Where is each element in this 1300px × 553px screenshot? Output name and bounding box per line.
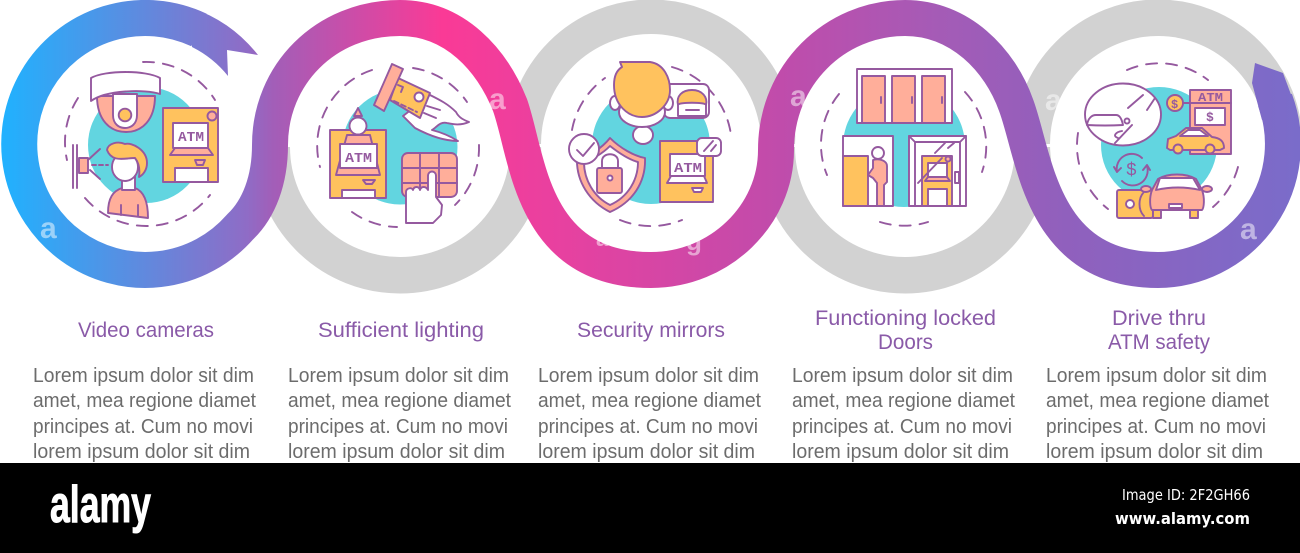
heading: Video cameras <box>78 319 214 342</box>
heading <box>815 307 996 354</box>
watermark letters: a <box>596 226 609 251</box>
body text: principes at. Cum no movi <box>1046 415 1266 438</box>
body text: principes at. Cum no movi <box>538 415 758 438</box>
car and cash <box>1117 174 1212 218</box>
body text: Lorem ipsum dolor sit dim <box>288 364 509 387</box>
icon: security mirrors <box>569 62 731 226</box>
body text: lorem ipsum dolor sit dim <box>792 440 1009 463</box>
ribbon end <box>1252 63 1296 120</box>
column 1: video cameras <box>33 319 256 463</box>
heading: Functioning locked <box>815 307 996 330</box>
body text: amet, mea regione diamet <box>33 389 256 412</box>
watermark letters: a <box>1045 84 1062 117</box>
website: www.alamy.com <box>1115 509 1250 528</box>
head from above <box>610 62 673 144</box>
body text: Lorem ipsum dolor sit dim <box>33 364 254 387</box>
wall sensor <box>73 145 108 188</box>
heading: Doors <box>878 331 933 354</box>
mirror with face <box>664 84 709 118</box>
heading <box>1108 307 1210 354</box>
body text <box>1046 364 1269 463</box>
body text <box>792 364 1015 463</box>
ATM with mirror <box>660 138 721 202</box>
column 4: functioning locked doors <box>792 307 1015 463</box>
icon: video cameras <box>65 62 218 226</box>
gradient ribbon <box>19 8 1296 270</box>
round mirror <box>1085 84 1161 146</box>
ATM and car: $ <box>1171 98 1178 112</box>
body text: amet, mea regione diamet <box>538 389 761 412</box>
column 2: sufficient lighting <box>288 319 511 463</box>
watermark letters: a <box>489 83 506 116</box>
alamy logo: alamy <box>50 476 151 534</box>
heading: ATM safety <box>1108 331 1210 354</box>
camera <box>91 72 160 132</box>
body text: amet, mea regione diamet <box>288 389 511 412</box>
body text: amet, mea regione diamet <box>1046 389 1269 412</box>
ATM machine: ATM <box>178 130 204 146</box>
ATM with mirror: ATM <box>674 161 702 177</box>
watermark letters: a <box>790 80 807 113</box>
card in hand <box>374 64 469 141</box>
heading: Drive thru <box>1112 307 1206 330</box>
body text: principes at. Cum no movi <box>792 415 1012 438</box>
body text: lorem ipsum dolor sit dim <box>288 440 505 463</box>
icon: drive thru ATM safety <box>1077 63 1238 218</box>
watermark letters: a <box>1240 213 1257 246</box>
shield and lock <box>569 134 645 212</box>
gray ring segments <box>272 18 1284 275</box>
watermark letters: a <box>40 212 57 245</box>
body text: Lorem ipsum dolor sit dim <box>1046 364 1267 387</box>
body text <box>288 364 511 463</box>
image id: Image ID: 2F2GH66 <box>1122 486 1250 504</box>
watermark letters <box>40 80 1257 256</box>
white discs <box>37 34 1266 257</box>
body text: principes at. Cum no movi <box>33 415 253 438</box>
body text <box>538 364 761 463</box>
body text: lorem ipsum dolor sit dim <box>33 440 250 463</box>
icon: sufficient lighting <box>317 64 479 227</box>
glass door with ATM <box>909 136 966 206</box>
ATM machine <box>163 108 218 182</box>
watermark letters: g <box>686 226 702 256</box>
ATM with bulb <box>330 108 386 198</box>
ATM and car <box>1167 90 1231 154</box>
person <box>107 143 148 218</box>
ATM and car: $ <box>1206 110 1214 125</box>
body text <box>33 364 256 463</box>
icon: functioning locked doors <box>821 69 986 226</box>
body text: principes at. Cum no movi <box>288 415 508 438</box>
heading: Security mirrors <box>577 319 725 342</box>
keypad <box>402 153 457 223</box>
arrow head <box>192 8 258 76</box>
column 3: security mirrors <box>538 319 761 463</box>
ATM with bulb: ATM <box>345 151 372 167</box>
body text: Lorem ipsum dolor sit dim <box>792 364 1013 387</box>
heading: Sufficient lighting <box>318 319 484 342</box>
money exchange: $ <box>1126 161 1137 181</box>
body text: Lorem ipsum dolor sit dim <box>538 364 759 387</box>
column 5: drive thru ATM safety <box>1046 307 1269 463</box>
footer bar <box>0 463 1300 553</box>
body text: lorem ipsum dolor sit dim <box>1046 440 1263 463</box>
ATM and car: ATM <box>1198 91 1223 105</box>
money exchange <box>1114 154 1150 185</box>
windows <box>857 69 952 123</box>
door with person <box>843 136 893 206</box>
body text: lorem ipsum dolor sit dim <box>538 440 755 463</box>
body text: amet, mea regione diamet <box>792 389 1015 412</box>
